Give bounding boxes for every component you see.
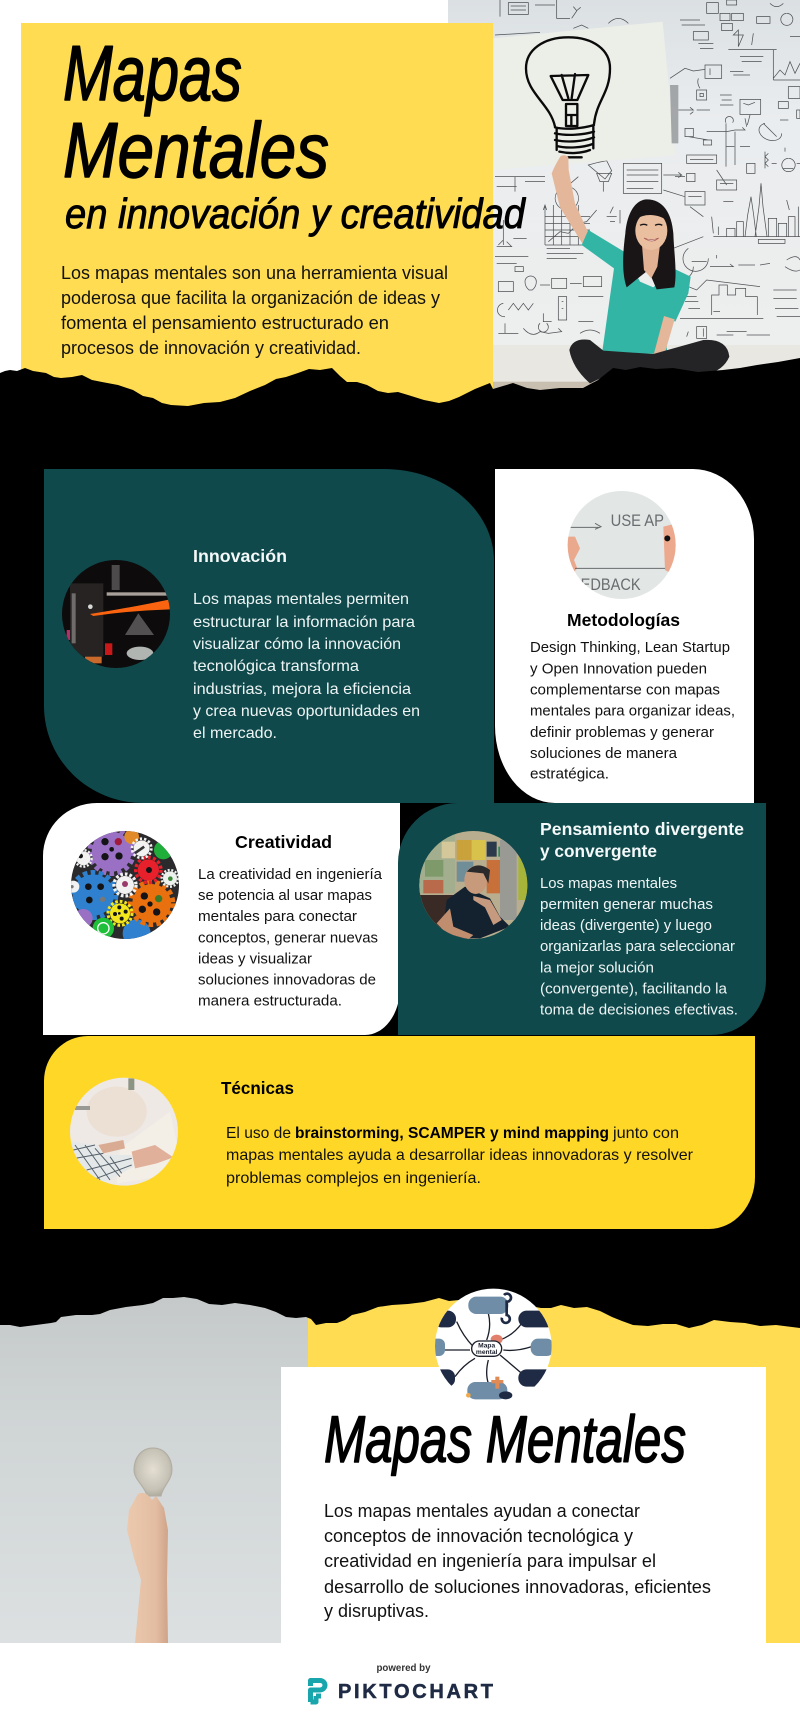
hair <box>623 199 676 289</box>
body text: Los mapas mentales <box>540 875 677 892</box>
body text: y disruptivas. <box>324 1601 429 1621</box>
heading <box>540 819 744 861</box>
hero yellow panel <box>21 23 493 413</box>
body text: brainstorming, SCAMPER y mind mapping <box>295 1125 609 1142</box>
logo wordmark: PIKTOCHART <box>338 1681 493 1703</box>
heading: y convergente <box>540 841 657 861</box>
center node <box>472 1341 502 1356</box>
body text: toma de decisiones efectivas. <box>540 1002 738 1018</box>
body text: junto con <box>612 1125 679 1142</box>
body text: problemas complejos en ingeniería. <box>226 1170 481 1187</box>
body text: el mercado. <box>193 725 277 742</box>
photo: hand holding lightbulb <box>127 1448 172 1643</box>
shirt <box>582 230 691 354</box>
panel: Pensamiento divergente y convergente <box>398 803 766 1035</box>
photo: whiteboard <box>567 490 677 600</box>
body text <box>530 639 735 782</box>
body text: conceptos de innovación tecnológica y <box>324 1526 633 1546</box>
body text: soluciones innovadoras de <box>198 972 376 988</box>
subtitle: en innovación y creatividad <box>65 190 526 237</box>
heading: Técnicas <box>221 1078 294 1098</box>
body text: mentales para conectar <box>198 908 357 925</box>
circle: mind map diagram <box>430 1289 555 1403</box>
light bulb <box>134 1448 172 1496</box>
photo: man with posters <box>418 830 528 940</box>
body text: definir problemas y generar <box>530 724 714 741</box>
body text <box>198 866 383 1010</box>
photo: whiteboard: USE AP <box>611 511 664 530</box>
body text: la mejor solución <box>540 960 654 976</box>
held sign <box>493 22 675 170</box>
center node: Mapa <box>478 1343 495 1350</box>
body text: permiten generar muchas <box>540 896 713 913</box>
icon: Piktochart logo <box>310 1680 325 1702</box>
hero photo: woman holding lightbulb sign <box>448 0 800 420</box>
panel: Innovación <box>44 469 494 803</box>
intro text: Los mapas mentales son una herramienta visual <box>61 263 448 283</box>
heading: Creatividad <box>235 832 332 852</box>
panel: Creatividad <box>43 803 400 1035</box>
body text: estructurar la información para <box>193 614 415 631</box>
photo: 3D printer <box>60 558 173 672</box>
panel: Técnicas <box>44 1036 755 1229</box>
body text: ideas (divergente) y luego <box>540 917 712 934</box>
black torn paper band <box>0 358 800 1328</box>
title: Mapas Mentales <box>63 29 329 194</box>
body text: Los mapas mentales ayudan a conectar <box>324 1501 640 1521</box>
powered by: powered by <box>376 1662 431 1674</box>
body text: mapas mentales ayuda a desarrollar ideas innovadoras y resolver <box>226 1147 694 1164</box>
lightbulb drawing <box>526 37 610 157</box>
heading: Innovación <box>193 546 287 566</box>
body text: manera estructurada. <box>198 992 342 1010</box>
intro text <box>61 263 448 358</box>
heading: Pensamiento divergente <box>540 819 744 839</box>
title: Mapas Mentales: Mentales <box>63 106 329 194</box>
body text <box>226 1125 694 1187</box>
center node: mental <box>476 1349 498 1356</box>
body text: mentales para organizar ideas, <box>530 702 735 720</box>
body text: y crea nuevas oportunidades en <box>193 703 420 720</box>
body text: desarrollo de soluciones innovadoras, eficientes <box>324 1577 711 1597</box>
body text: tecnológica transforma <box>193 658 359 675</box>
heading: Metodologías <box>567 610 680 630</box>
title: Mapas Mentales: Mapas <box>63 29 242 117</box>
photo: hands over paper <box>69 1077 180 1187</box>
body text: El uso de <box>226 1125 291 1142</box>
hand and arm <box>127 1493 168 1643</box>
intro text: poderosa que facilita la organización de ideas y <box>61 288 440 308</box>
photo: whiteboard: EDBACK <box>581 575 641 594</box>
footer: powered by Piktochart <box>310 1662 493 1703</box>
body text: industrias, mejora la eficiencia <box>193 681 411 698</box>
body text: ideas y visualizar <box>198 950 312 968</box>
intro text: procesos de innovación y creatividad. <box>61 338 361 358</box>
body text: creatividad en ingeniería para impulsar el <box>324 1551 656 1571</box>
neck and face <box>642 245 660 278</box>
body text: La creatividad en ingeniería <box>198 866 383 883</box>
panel: Metodologías <box>495 469 754 803</box>
heading: Mapas Mentales <box>324 1402 686 1476</box>
panel: closing text <box>281 1367 766 1643</box>
body text: soluciones de manera <box>530 745 678 762</box>
lowered arm <box>651 316 675 367</box>
body text: visualizar cómo la innovación <box>193 636 401 653</box>
intro text: fomenta el pensamiento estructurado en <box>61 313 389 333</box>
body text <box>193 591 420 742</box>
body text: organizarlas para seleccionar <box>540 938 735 955</box>
body text: y Open Innovation pueden <box>530 660 707 678</box>
body text: estratégica. <box>530 766 609 782</box>
body text: (convergente), facilitando la <box>540 980 728 998</box>
bottom section backgrounds <box>0 1290 800 1643</box>
body text <box>324 1501 711 1621</box>
body text: Los mapas mentales permiten <box>193 591 409 608</box>
body text: se potencia al usar mapas <box>198 887 372 904</box>
photo: colored gears <box>71 831 179 939</box>
legs <box>569 340 729 383</box>
body text: conceptos, generar nuevas <box>198 930 378 946</box>
raised arm <box>552 155 589 244</box>
body text: complementarse con mapas <box>530 682 720 698</box>
body text <box>540 875 738 1018</box>
body text: Design Thinking, Lean Startup <box>530 639 730 656</box>
